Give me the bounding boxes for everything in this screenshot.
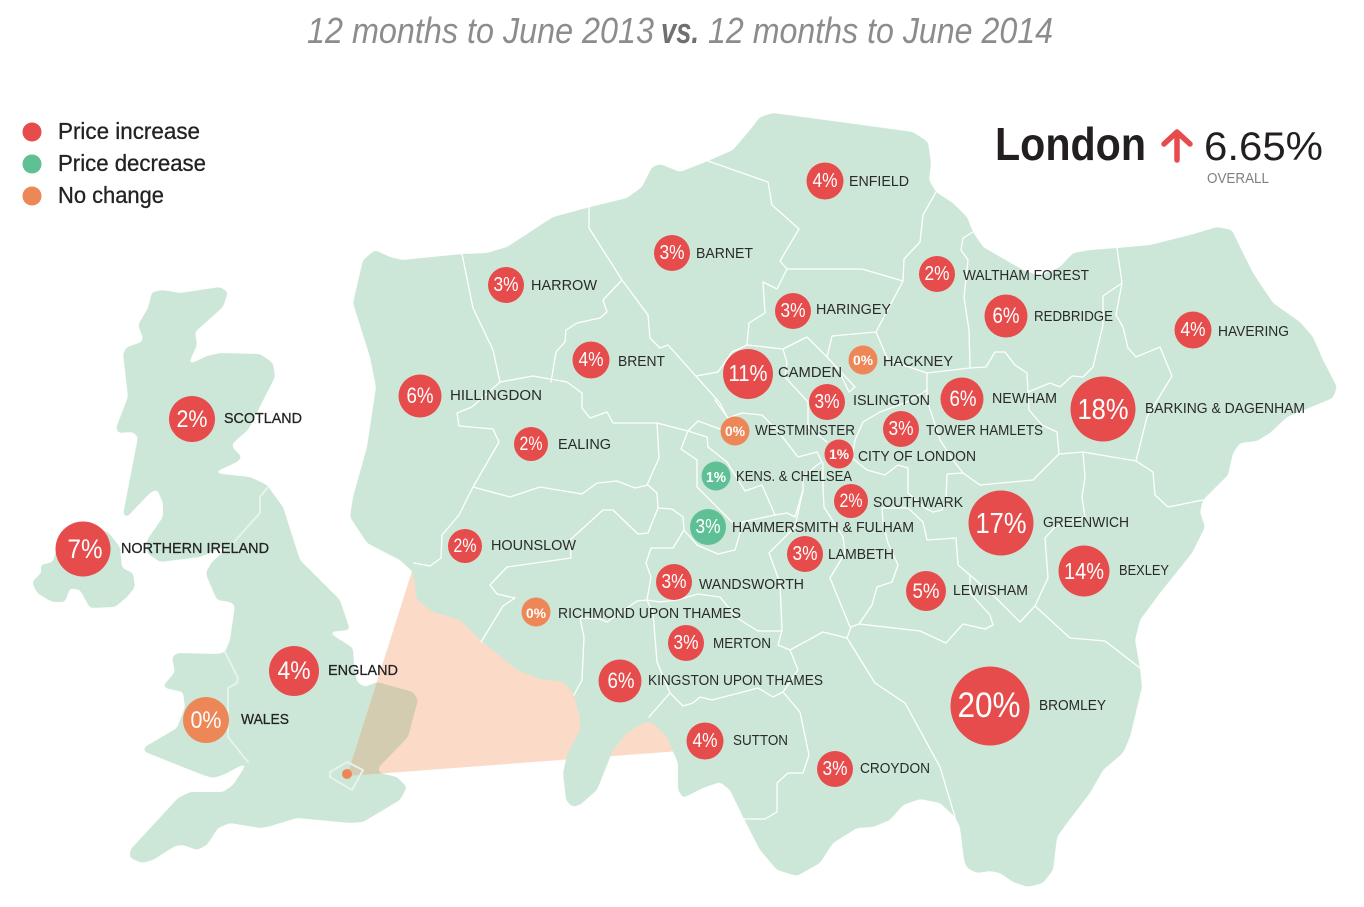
marker: Merton (668, 625, 771, 661)
marker: Bexley: 14% (1064, 558, 1104, 584)
marker: Southwark: 2% (840, 491, 863, 512)
marker: Wales: WALES (241, 712, 289, 728)
marker: Wandsworth (656, 564, 804, 600)
marker: Enfield: ENFIELD (849, 174, 909, 190)
marker: Tower Hamlets: TOWER HAMLETS (926, 423, 1043, 439)
legend item: no change: No change (58, 182, 164, 208)
marker: Islington: 3% (814, 391, 840, 413)
marker: Merton: 3% (674, 632, 699, 654)
marker: Haringey (775, 293, 891, 329)
marker: Croydon: CROYDON (860, 761, 930, 777)
legend (22, 118, 206, 208)
marker: Waltham Forest: 2% (924, 263, 950, 285)
marker: Newham: NEWHAM (992, 391, 1057, 407)
marker: Barnet (654, 235, 753, 271)
marker: Ealing: EALING (558, 437, 611, 453)
marker: Waltham Forest: WALTHAM FOREST (963, 268, 1089, 284)
marker: Haringey: 3% (780, 300, 806, 322)
marker: Croydon: 3% (822, 758, 848, 780)
marker: Kingston upon Thames (598, 660, 823, 702)
headline: London overall change: OVERALL (1207, 170, 1269, 187)
marker: Ealing (514, 427, 611, 461)
marker: Barking and Dagenham: BARKING & DAGENHAM (1145, 401, 1305, 417)
marker: Greenwich: GREENWICH (1043, 515, 1129, 531)
marker: Hounslow: HOUNSLOW (491, 538, 576, 554)
marker: Bromley: BROMLEY (1039, 698, 1106, 714)
marker: City of London: 1% (829, 446, 850, 462)
marker: Richmond upon Thames: RICHMOND UPON THAMES (558, 606, 741, 622)
marker: Tower Hamlets: 3% (888, 418, 914, 440)
marker: Hounslow: 2% (454, 536, 477, 557)
headline: London overall change: 6.65% (1204, 125, 1323, 169)
marker: Sutton (686, 722, 788, 760)
marker: Bromley (950, 666, 1106, 746)
title: vs. (661, 10, 699, 51)
marker: Wales: 0% (190, 707, 222, 734)
marker: Waltham Forest (919, 256, 1089, 292)
marker: Northern Ireland: 7% (68, 534, 102, 564)
headline: London overall change: London (995, 118, 1146, 170)
marker: Tower Hamlets (883, 411, 1043, 447)
marker: Islington: ISLINGTON (853, 393, 930, 409)
UK country borders and London locator (225, 487, 363, 790)
marker: City of London (824, 440, 976, 468)
marker: Sutton: SUTTON (733, 733, 788, 749)
marker: Wales (183, 697, 289, 743)
title (307, 10, 1053, 51)
marker: Havering: 4% (1180, 319, 1206, 341)
marker: Hammersmith and Fulham: HAMMERSMITH & FULHAM (732, 520, 914, 536)
marker: Wandsworth: WANDSWORTH (699, 577, 804, 593)
marker: Hounslow (448, 529, 576, 563)
marker: Westminster (720, 416, 855, 446)
marker: Camden (723, 349, 842, 399)
marker: Lewisham: LEWISHAM (953, 583, 1028, 599)
marker: Scotland: 2% (176, 406, 208, 433)
marker: Wandsworth: 3% (662, 571, 687, 593)
marker: Richmond upon Thames (522, 598, 741, 626)
marker: Southwark: SOUTHWARK (873, 495, 963, 511)
marker: Kensington and Chelsea: KENS. & CHELSEA (736, 469, 852, 485)
marker: Westminster: 0% (725, 423, 746, 439)
title: 12 months to June 2014 (708, 10, 1053, 51)
marker: Havering (1174, 312, 1289, 348)
marker: Newham (940, 378, 1057, 420)
marker: Southwark (834, 484, 963, 518)
marker: Hackney (848, 346, 953, 374)
marker: England (269, 646, 398, 696)
marker: Islington (809, 384, 930, 420)
marker: Harrow: HARROW (531, 278, 597, 294)
headline: London overall change (995, 118, 1323, 187)
marker: Hammersmith and Fulham: 3% (696, 516, 721, 538)
marker: Greenwich (968, 490, 1129, 556)
marker: Hackney: HACKNEY (883, 354, 953, 370)
marker: Kensington and Chelsea (702, 462, 852, 490)
marker: Enfield (806, 162, 909, 200)
marker: Hillingdon: 6% (406, 383, 434, 408)
marker: Hammersmith and Fulham (690, 509, 914, 545)
marker: Camden: CAMDEN (778, 365, 842, 381)
marker: Barking and Dagenham: 18% (1078, 394, 1128, 426)
legend item: price decrease: Price decrease (58, 150, 206, 176)
marker: Merton: MERTON (713, 636, 771, 652)
land: Great Britain (116, 287, 418, 863)
marker: Croydon (817, 751, 930, 787)
marker: Greenwich: 17% (976, 508, 1026, 540)
marker: Kingston upon Thames: 6% (608, 668, 634, 693)
marker: Newham: 6% (950, 386, 976, 411)
marker: Hillingdon: HILLINGDON (450, 388, 542, 404)
marker: Redbridge: 6% (992, 303, 1020, 328)
marker: Lewisham: 5% (912, 580, 940, 603)
marker: Brent (572, 342, 665, 378)
legend item: price increase: Price increase (58, 118, 200, 144)
zoom cone from London locator to London map (349, 572, 674, 776)
map: London boroughs (350, 113, 1337, 887)
marker: Northern Ireland (56, 522, 269, 576)
marker: England: 4% (278, 657, 310, 685)
marker: Barnet: BARNET (696, 246, 753, 262)
marker: Scotland (169, 396, 302, 442)
marker: Haringey: HARINGEY (816, 302, 891, 318)
marker: Westminster: WESTMINSTER (755, 423, 855, 439)
marker: Kensington and Chelsea: 1% (706, 469, 726, 486)
marker: Redbridge: REDBRIDGE (1034, 309, 1113, 325)
marker: Brent: BRENT (618, 354, 665, 370)
marker: Richmond upon Thames: 0% (526, 605, 547, 621)
marker: Northern Ireland: NORTHERN IRELAND (121, 541, 269, 557)
marker: Barking and Dagenham (1070, 376, 1305, 442)
marker: Bexley (1058, 546, 1169, 596)
marker: England: ENGLAND (328, 663, 398, 679)
marker: Enfield: 4% (812, 170, 838, 192)
marker: Lambeth: LAMBETH (828, 547, 894, 563)
marker: Scotland: SCOTLAND (224, 411, 302, 427)
marker: Camden: 11% (728, 360, 768, 386)
land: Greater London (350, 113, 1337, 887)
map: United Kingdom (32, 287, 418, 863)
marker: City of London: CITY OF LONDON (858, 449, 976, 465)
marker: Redbridge (984, 294, 1113, 338)
marker: Kingston upon Thames: KINGSTON UPON THAMES (648, 673, 823, 689)
marker: Brent: 4% (578, 349, 604, 371)
marker: Harrow (488, 267, 597, 303)
land: Northern Ireland (32, 525, 135, 608)
marker: Ealing: 2% (520, 434, 543, 455)
marker: Lambeth: 3% (792, 543, 818, 565)
icon: up arrow (1164, 132, 1190, 160)
marker: Sutton: 4% (692, 730, 718, 752)
marker: Harrow: 3% (494, 274, 519, 296)
marker: Bexley: BEXLEY (1119, 563, 1169, 579)
title: 12 months to June 2013 (307, 10, 654, 51)
marker: Bromley: 20% (958, 686, 1020, 725)
marker: Hillingdon (398, 374, 542, 418)
marker: Havering: HAVERING (1218, 324, 1289, 340)
marker: Lambeth (787, 536, 894, 572)
marker: Barnet: 3% (660, 242, 685, 264)
marker: Lewisham (906, 571, 1028, 611)
marker: Hackney: 0% (853, 352, 874, 368)
